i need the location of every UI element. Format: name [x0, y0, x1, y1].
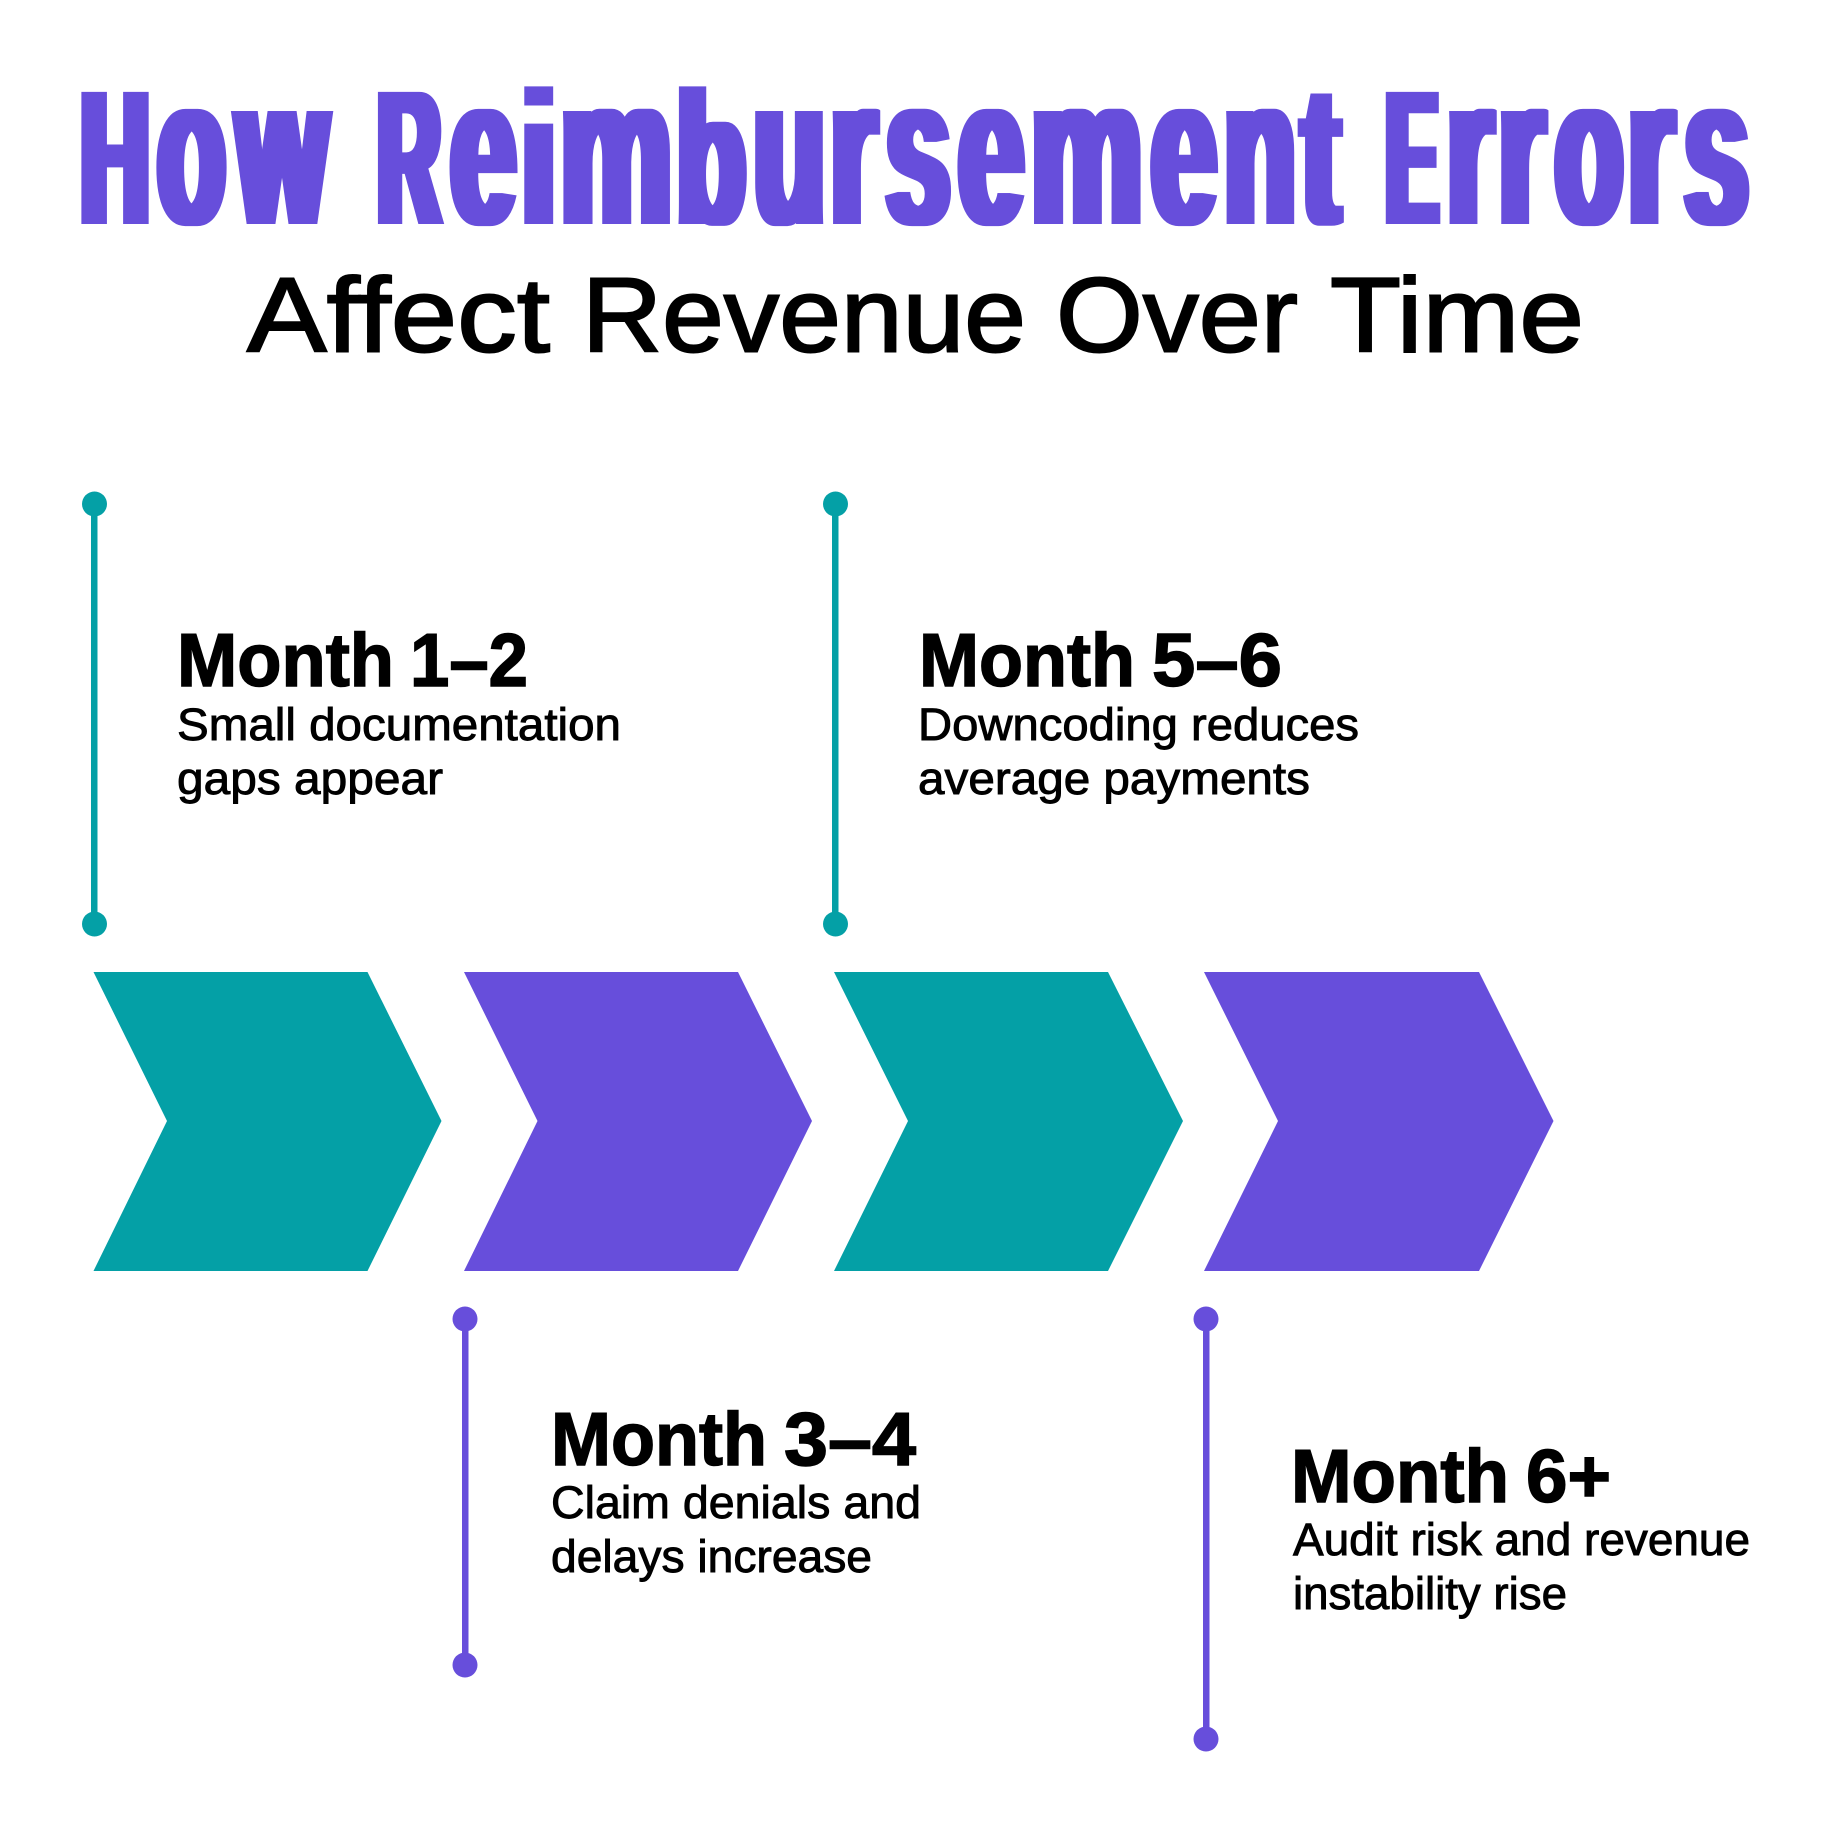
- description: month 3-4: [551, 1477, 921, 1582]
- title: main heading: b: [677, 53, 745, 265]
- heading: month 3-4: Month: [551, 1397, 767, 1481]
- title: main heading: s: [886, 31, 950, 270]
- title: main heading: t: [1302, 44, 1339, 267]
- description: month 5-6: [918, 699, 1359, 804]
- text block: month 5-6: [918, 618, 1359, 804]
- subtitle: Affect: [247, 256, 550, 374]
- title: main heading: R: [378, 50, 440, 265]
- description: month 5-6: average payments: [918, 753, 1310, 804]
- description: month 6+: [1293, 1514, 1750, 1619]
- title: main heading: m: [561, 31, 672, 270]
- chevron 1: [94, 972, 442, 1271]
- description: month 5-6: Downcoding reduces: [918, 699, 1359, 750]
- title: main heading: H: [81, 50, 149, 265]
- title: main heading: s: [1685, 31, 1748, 270]
- chevron timeline: [94, 972, 1554, 1271]
- text block: month 6+: [1291, 1434, 1750, 1619]
- title: main heading: o: [158, 31, 225, 270]
- subtitle: Time: [1330, 256, 1584, 374]
- chevron 2: [464, 972, 812, 1271]
- subtitle: Revenue: [582, 256, 1026, 374]
- title: main heading: r: [1499, 31, 1544, 270]
- title: main heading: n: [1224, 31, 1295, 270]
- title: main heading: u: [754, 31, 825, 270]
- title: main heading: r: [1448, 31, 1492, 270]
- description: month 1-2: Small documentation: [177, 699, 621, 750]
- heading: month 5-6: Month: [919, 618, 1135, 702]
- title: main heading: m: [1031, 31, 1142, 270]
- title: main heading: E: [1387, 50, 1437, 265]
- chevron 3: [834, 972, 1183, 1271]
- heading: month 1-2: Month: [177, 618, 394, 702]
- title: main heading: i: [522, 53, 556, 265]
- chevron 4: [1204, 972, 1554, 1271]
- description: month 6+: instability rise: [1293, 1568, 1567, 1619]
- title: main heading: r: [1628, 31, 1674, 270]
- text block: month 3-4: [551, 1397, 921, 1582]
- title: main heading: e: [1152, 31, 1216, 270]
- heading: month 1-2: 1–2: [410, 618, 528, 702]
- heading: month 6+: Month: [1291, 1434, 1509, 1518]
- connector: month 5-6: [823, 492, 848, 936]
- description: month 3-4: delays increase: [551, 1531, 872, 1582]
- connector: month 1-2: [82, 492, 107, 936]
- description: month 1-2: gaps appear: [177, 753, 443, 804]
- title: main heading: w: [237, 31, 327, 270]
- title: main heading: o: [1556, 31, 1622, 270]
- title: main heading: e: [451, 31, 516, 270]
- title: main heading: r: [831, 31, 876, 270]
- description: month 6+: Audit risk and revenue: [1293, 1514, 1750, 1565]
- heading: month 3-4: 3–4: [784, 1397, 916, 1481]
- connector: month 3-4: [452, 1306, 478, 1678]
- text block: month 1-2: [177, 618, 621, 804]
- heading: month 5-6: 5–6: [1152, 618, 1282, 702]
- connector: month 6+: [1194, 1306, 1218, 1752]
- title: main heading: [81, 31, 1748, 270]
- description: month 1-2: [177, 699, 621, 804]
- heading: month 6+: 6+: [1526, 1434, 1611, 1518]
- subtitle: Over: [1056, 256, 1298, 374]
- title: main heading: e: [959, 31, 1023, 270]
- description: month 3-4: Claim denials and: [551, 1477, 921, 1528]
